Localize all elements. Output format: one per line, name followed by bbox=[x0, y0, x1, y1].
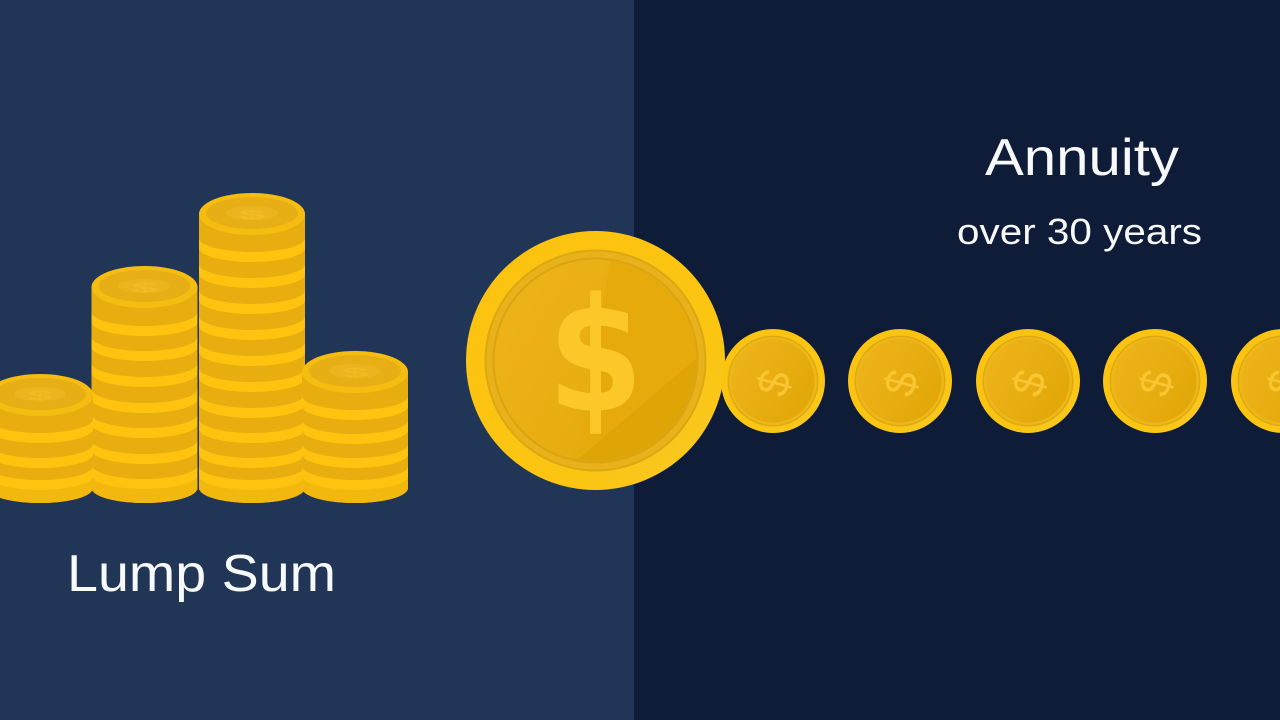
subheading: over 30 years: over 30 years bbox=[957, 211, 1202, 252]
icon: small coin 1 bbox=[721, 329, 825, 433]
coin stack: left bbox=[0, 374, 93, 503]
coin stack: tallest: $ bbox=[239, 208, 266, 222]
coin stack: left: $ bbox=[27, 389, 54, 403]
icon: small coin 2 bbox=[848, 329, 952, 433]
icon: stacks of gold coins bbox=[0, 193, 408, 503]
icon: small coin 5 bbox=[1231, 329, 1280, 433]
panel: annuity background bbox=[634, 0, 1280, 720]
panel: lump sum background bbox=[0, 0, 634, 720]
icon: large dollar coin bbox=[466, 231, 725, 490]
icon: small coin 3 bbox=[976, 329, 1080, 433]
icon: small coin 3: $ bbox=[1003, 365, 1056, 401]
coin stack: tallest bbox=[199, 193, 305, 503]
heading: annuity: Annuity bbox=[985, 129, 1179, 187]
coin stack: right: $ bbox=[342, 366, 369, 380]
icon: small coin 4: $ bbox=[1130, 365, 1183, 401]
icon: small coin 4 bbox=[1103, 329, 1207, 433]
coin stack: second tallest: $ bbox=[131, 281, 159, 295]
icon: small coin 1: $ bbox=[748, 365, 801, 401]
coin stack: second tallest bbox=[92, 266, 198, 503]
dollar sign: $ bbox=[548, 264, 643, 448]
heading: lump sum: Lump Sum bbox=[67, 545, 336, 603]
icon: small coin 2: $ bbox=[875, 365, 928, 401]
coin stack: right bbox=[302, 351, 408, 503]
